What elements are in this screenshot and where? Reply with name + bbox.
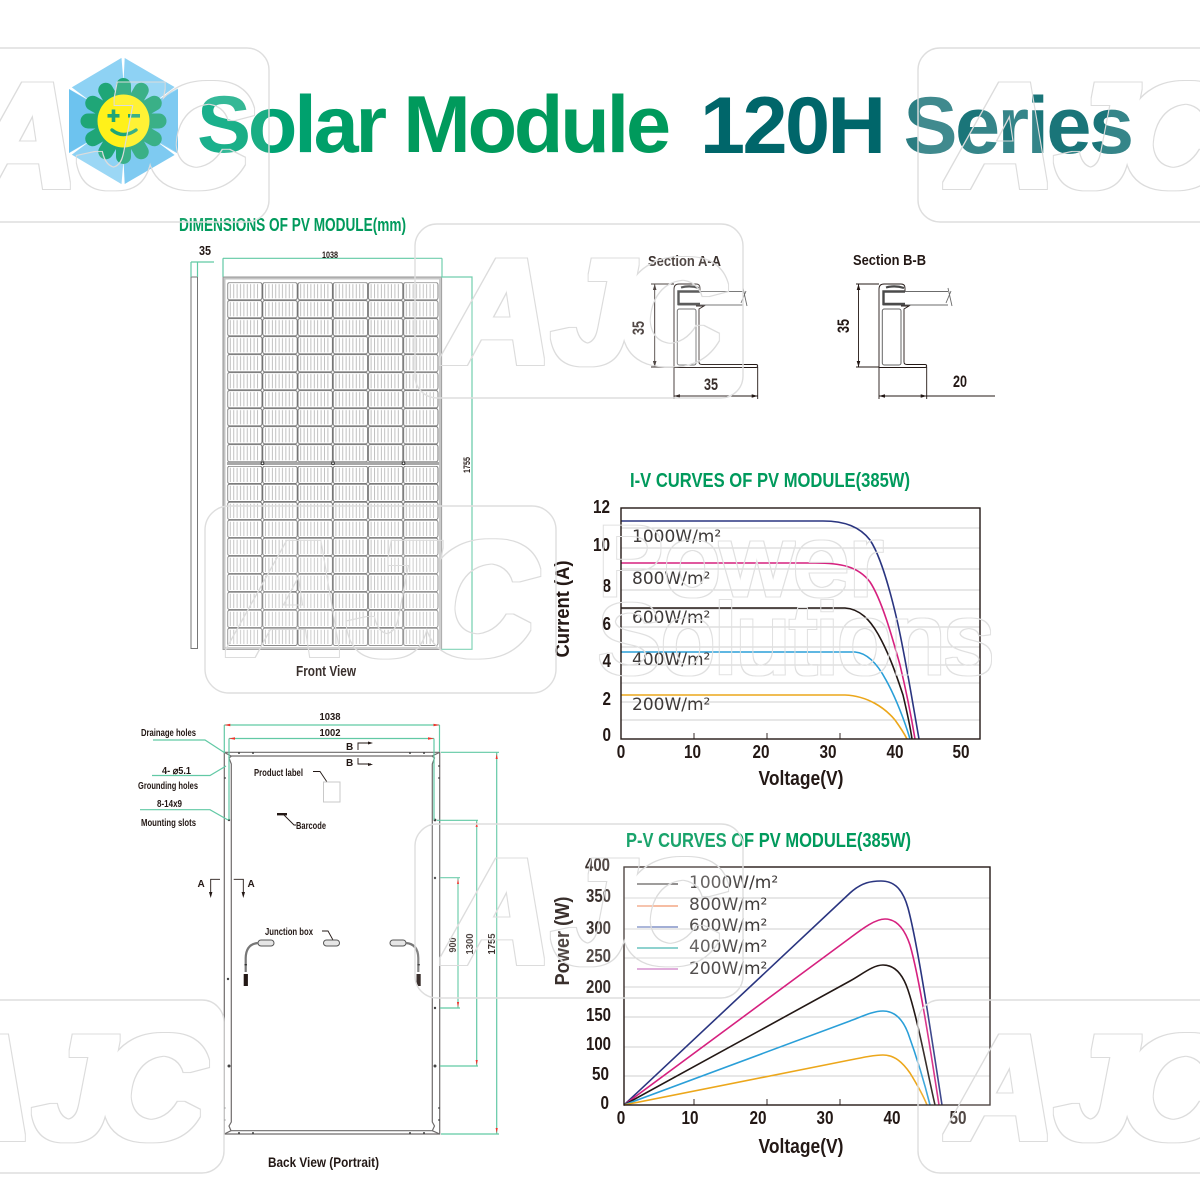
watermark: Power Solutions (597, 506, 993, 694)
x axis numbers: 10 (682, 1108, 698, 1128)
callout: product label: Product label (254, 768, 303, 779)
x axis numbers: 40 (886, 742, 904, 762)
callout: barcode (277, 813, 326, 832)
y axis numbers: 10 (593, 535, 610, 555)
callout: junction box (258, 927, 406, 946)
y axis numbers: 150 (586, 1005, 611, 1025)
x axis numbers: 20 (752, 742, 770, 762)
y axis numbers: 50 (592, 1064, 609, 1084)
y axis numbers: 100 (586, 1034, 611, 1054)
x axis numbers: 10 (684, 742, 701, 762)
frame holes (224, 752, 440, 1134)
legend (637, 873, 778, 979)
x axis numbers: 50 (952, 742, 970, 762)
section marker A: A (198, 879, 205, 890)
callout: junction box: Junction box (265, 927, 313, 938)
y axis numbers: 300 (586, 918, 611, 938)
chart: I-V curves (552, 497, 980, 790)
y axis numbers: 2 (602, 689, 611, 709)
callout: mounting slots (140, 799, 228, 829)
curve labels: 600W/m² (632, 608, 710, 628)
centre junction band (227, 462, 439, 465)
dimension 1755 (441, 277, 473, 649)
section marker B: B (346, 758, 353, 769)
panel: section A-A: Section A-A (648, 253, 721, 270)
watermark: AJC tile lower centre: AJC (443, 830, 726, 993)
front frame (223, 277, 442, 650)
callout: product label (254, 768, 340, 802)
y axis numbers: 4 (602, 651, 611, 671)
callout: barcode: Barcode (296, 821, 326, 832)
axis title: current: Current (A) (552, 560, 574, 658)
watermark: Power Solutions: Solutions (597, 584, 993, 694)
y axis numbers: 8 (602, 576, 611, 596)
curve labels: 800W/m² (632, 569, 710, 589)
curve labels: 200W/m² (632, 695, 710, 715)
panel: section B-B: 35 (834, 319, 853, 333)
side profile strip: 35 (199, 243, 211, 258)
dimension 1038 (223, 250, 442, 277)
panel: section B-B (834, 252, 995, 399)
axis title: voltage: Voltage(V) (758, 1136, 844, 1158)
icon: sunflower hexagon logo (64, 52, 182, 190)
legend: 1000W/m² (689, 873, 778, 893)
y axis numbers: 12 (593, 497, 610, 517)
callout: grounding holes (138, 766, 226, 792)
dimensions 1038 and 1002 (224, 712, 440, 820)
x axis numbers: 20 (750, 1108, 766, 1128)
dimensions 900 1300 1755: 1755 (487, 933, 498, 954)
curve labels: 1000W/m² (632, 527, 721, 547)
heading: dimensions: DIMENSIONS OF PV MODULE(mm) (179, 215, 406, 235)
callout: mounting slots: 8-14x9 (157, 799, 182, 810)
callout: drainage holes: Drainage holes (141, 728, 196, 739)
watermark: AJC tile upper centre: AJC (443, 230, 726, 393)
solar cell grid bottom half (227, 466, 438, 646)
dimension 1038: 1038 (322, 250, 338, 261)
heading: I-V curves: I-V CURVES OF PV MODULE(385W) (630, 470, 910, 492)
title: Solar Module: Solar Module (197, 80, 671, 170)
y axis numbers: 200 (586, 977, 611, 997)
label: back view: Back View (Portrait) (268, 1154, 379, 1170)
side profile strip (191, 243, 214, 648)
callout: grounding holes: 4- ⌀5.1 (162, 766, 191, 777)
x axis numbers (617, 1108, 966, 1128)
x axis numbers (617, 742, 970, 762)
legend: 200W/m² (689, 959, 767, 979)
x axis numbers: 30 (820, 742, 836, 762)
x axis numbers: 0 (617, 742, 625, 762)
y axis numbers: 400 (585, 855, 610, 875)
x axis numbers: 30 (816, 1108, 834, 1128)
heading: P-V curves: P-V CURVES OF PV MODULE(385W) (626, 830, 911, 852)
curve labels (632, 527, 721, 715)
callout: drainage holes (141, 728, 225, 753)
y axis numbers: 250 (586, 946, 611, 966)
panel: back view drawing (138, 712, 499, 1170)
panel: section A-A: 35 (629, 321, 648, 335)
curve labels: 400W/m² (632, 650, 710, 670)
y axis numbers (585, 855, 611, 1113)
label: front view: Front View (296, 663, 356, 680)
panel: front view drawing (191, 243, 473, 680)
dimensions 900 1300 1755 (437, 752, 499, 1134)
dimensions 1038 and 1002: 1038 (320, 712, 341, 723)
axis title: power: Power (W) (552, 896, 574, 986)
solar cell grid top half (227, 282, 438, 462)
section marker B: B (346, 742, 353, 753)
title: 120H Series: 120H Series (700, 81, 1134, 171)
back frame (224, 752, 440, 1134)
dimension 1755: 1755 (462, 456, 473, 473)
dimensions 900 1300 1755: 1300 (465, 933, 476, 954)
axis title: voltage: Voltage(V) (758, 768, 844, 790)
y axis numbers: 0 (602, 725, 611, 745)
chart: P-V curves (552, 855, 990, 1158)
dimensions 900 1300 1755: 900 (448, 937, 459, 952)
callout: grounding holes: Grounding holes (138, 781, 198, 792)
legend: 800W/m² (689, 895, 767, 915)
x axis numbers: 50 (950, 1108, 966, 1128)
callout: mounting slots: Mounting slots (141, 818, 196, 829)
y axis numbers: 0 (600, 1093, 609, 1113)
legend: 400W/m² (689, 937, 767, 957)
legend: 600W/m² (689, 916, 767, 936)
watermark: AJC tile mid left: AJC (228, 509, 538, 688)
x axis numbers: 0 (617, 1108, 625, 1128)
y axis numbers (593, 497, 611, 745)
panel: section A-A: 35 (704, 375, 718, 394)
watermark: Power Solutions: Power (597, 506, 883, 616)
y axis numbers: 6 (602, 614, 611, 634)
left cable and connector (244, 943, 258, 986)
section marker A (198, 879, 255, 898)
panel: section B-B: 20 (953, 372, 967, 391)
section marker A: A (248, 879, 255, 890)
panel: section B-B: Section B-B (853, 252, 926, 269)
y axis numbers: 350 (586, 886, 611, 906)
panel: section A-A (629, 253, 758, 399)
right cable and connector (406, 943, 421, 986)
dimensions 1038 and 1002: 1002 (320, 728, 341, 739)
section marker B (346, 742, 373, 769)
x axis numbers: 40 (884, 1108, 900, 1128)
